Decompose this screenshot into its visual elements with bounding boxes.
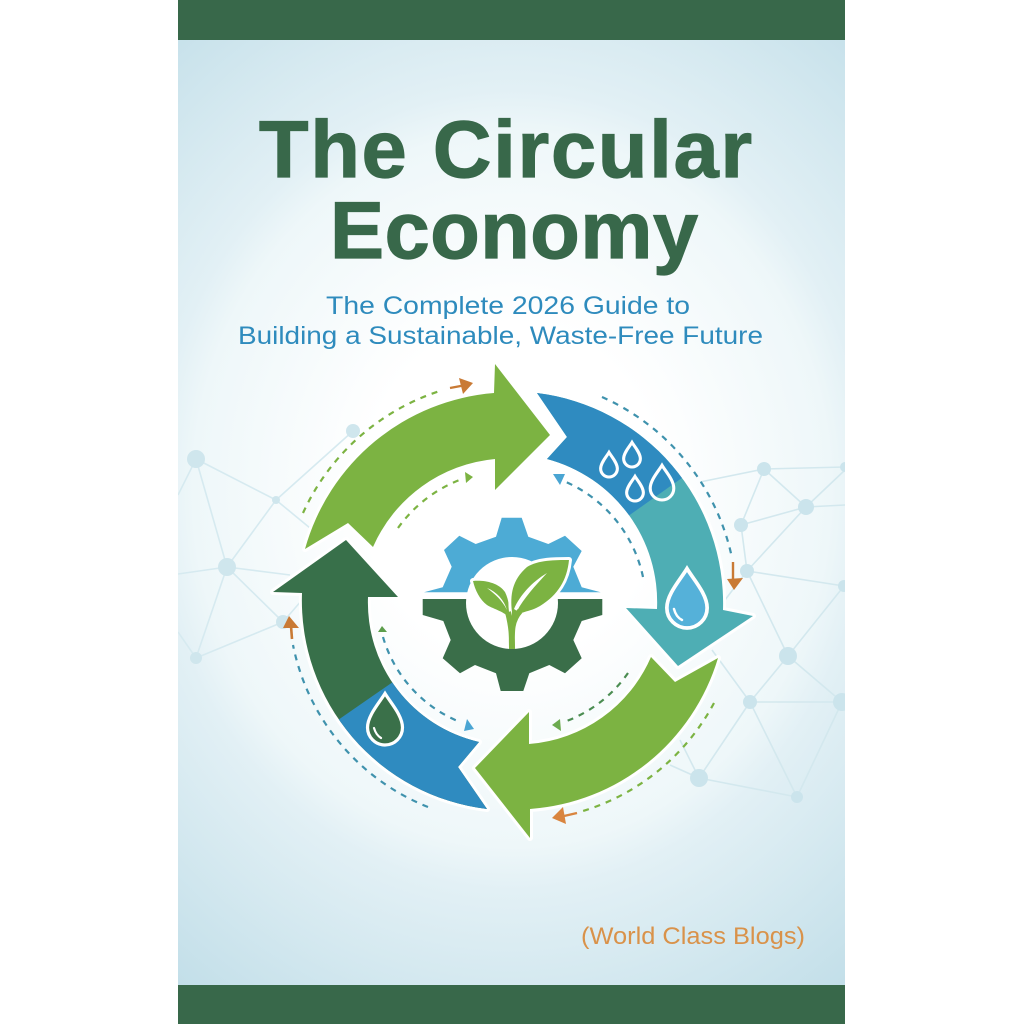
gear lower half xyxy=(423,599,602,691)
arrow: right blue and teal xyxy=(537,393,753,666)
footer credit: (World Class Blogs) xyxy=(581,923,805,950)
title: Economy xyxy=(330,186,698,276)
arrow: top green xyxy=(305,364,550,549)
blue tail xyxy=(339,682,487,809)
leaf veins xyxy=(487,573,547,611)
dashed arrow: bottom inner xyxy=(552,673,628,731)
dashed arrow: bottom outer xyxy=(552,703,714,824)
network pattern right xyxy=(670,462,851,803)
dashed arrow: left inner xyxy=(378,626,474,731)
gear hub xyxy=(466,557,558,649)
dashed arrow: top inner xyxy=(398,472,473,528)
dashed arrow: right inner xyxy=(553,474,643,577)
arrow: left dark green and blue xyxy=(273,540,487,809)
background panel xyxy=(178,40,845,985)
title: The Circular xyxy=(259,105,752,195)
dashed arrow: left outer xyxy=(283,616,428,807)
icon: four small water drops xyxy=(601,442,674,501)
stem xyxy=(508,611,520,649)
icon: dark water drop xyxy=(368,693,402,745)
left leaf xyxy=(473,581,510,620)
dashed arrow: top outer xyxy=(303,378,473,513)
arrow: bottom green xyxy=(475,657,718,838)
blue tail xyxy=(537,393,682,516)
network pattern left xyxy=(178,424,360,664)
top bar xyxy=(178,0,845,40)
dark green body xyxy=(273,540,487,809)
icon: large water drop xyxy=(667,569,707,628)
right leaf xyxy=(511,560,569,618)
bottom bar xyxy=(178,985,845,1024)
icon: central gear with sprout xyxy=(423,518,602,691)
subtitle: The Complete 2026 Guide to xyxy=(326,292,690,320)
subtitle: Building a Sustainable, Waste-Free Future xyxy=(238,322,763,350)
title xyxy=(259,105,752,276)
subtitle xyxy=(238,292,763,350)
teal body xyxy=(537,393,753,666)
gear upper half xyxy=(424,518,601,592)
dashed arrow: right outer xyxy=(602,397,743,590)
